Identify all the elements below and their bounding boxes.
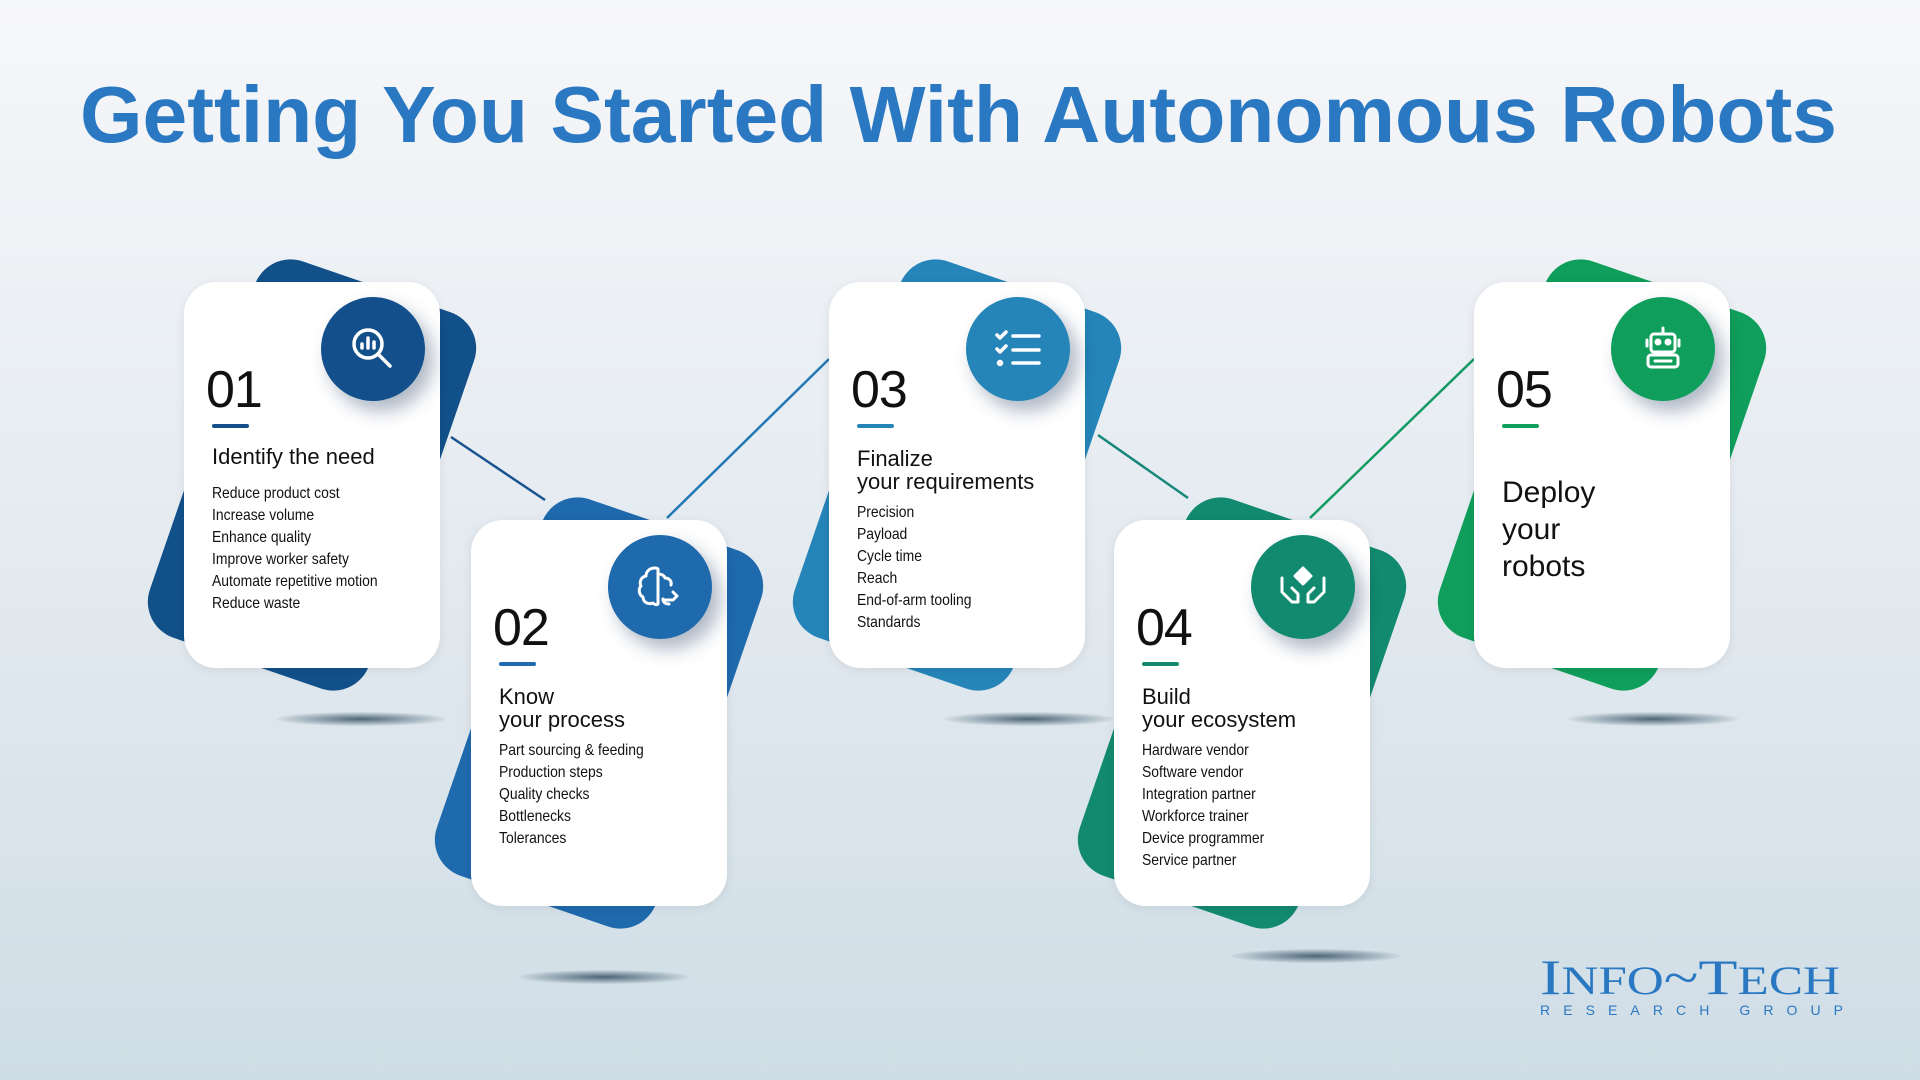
panel: step 02: [434, 497, 764, 929]
icon: brain: [608, 535, 712, 639]
list: Hardware vendor: [1142, 742, 1249, 759]
list: Precision: [857, 504, 914, 521]
number 01: 01: [206, 361, 262, 419]
list: Tolerances: [499, 830, 566, 847]
number 03: 03: [851, 361, 907, 419]
number 04: 04: [1136, 599, 1192, 657]
number 02: 02: [493, 599, 549, 657]
heading: [857, 446, 1034, 494]
list: [499, 742, 644, 847]
heading: [1142, 684, 1296, 732]
list: Device programmer: [1142, 830, 1264, 847]
heading: your ecosystem: [1142, 707, 1296, 732]
list: Production steps: [499, 764, 603, 781]
heading: your requirements: [857, 469, 1034, 494]
heading: your: [1502, 513, 1560, 546]
icon: robot: [1611, 297, 1715, 401]
heading: [499, 684, 625, 732]
list: Bottlenecks: [499, 808, 571, 825]
icon: checklist: [966, 297, 1070, 401]
heading: Build: [1142, 684, 1191, 709]
list: Automate repetitive motion: [212, 573, 378, 590]
list: Reach: [857, 570, 897, 587]
list: Payload: [857, 526, 907, 543]
logo: INFO ~T ECH: [1540, 949, 1840, 1005]
panel: step 05: [1438, 259, 1766, 691]
list: Reduce waste: [212, 595, 300, 612]
number 05: 05: [1496, 361, 1552, 419]
list: Improve worker safety: [212, 551, 349, 568]
list: [1142, 742, 1264, 869]
list: End-of-arm tooling: [857, 592, 972, 609]
heading: Identify the need: [212, 444, 375, 469]
list: Integration partner: [1142, 786, 1256, 803]
panel: step 04: [1078, 497, 1406, 929]
heading: Finalize: [857, 446, 933, 471]
heading: your process: [499, 707, 625, 732]
list: Reduce product cost: [212, 485, 340, 502]
icon: magnifier chart: [321, 297, 425, 401]
list: Software vendor: [1142, 764, 1243, 781]
heading: Know: [499, 684, 554, 709]
heading: [1502, 476, 1596, 583]
heading: robots: [1502, 550, 1585, 583]
list: [857, 504, 972, 631]
list: Enhance quality: [212, 529, 311, 546]
title: Getting You Started With Autonomous Robots: [80, 70, 1837, 159]
logo: RESEARCH GROUP: [1540, 1002, 1843, 1018]
list: Service partner: [1142, 852, 1236, 869]
list: Cycle time: [857, 548, 922, 565]
icon: hands with diamond: [1251, 535, 1355, 639]
list: Workforce trainer: [1142, 808, 1248, 825]
list: Standards: [857, 614, 920, 631]
heading: Deploy: [1502, 476, 1595, 509]
panel: step 03: [792, 259, 1122, 691]
list: Part sourcing & feeding: [499, 742, 644, 759]
list: Increase volume: [212, 507, 314, 524]
list: Quality checks: [499, 786, 590, 803]
panel: step 01: [148, 259, 476, 691]
list: [212, 485, 378, 612]
